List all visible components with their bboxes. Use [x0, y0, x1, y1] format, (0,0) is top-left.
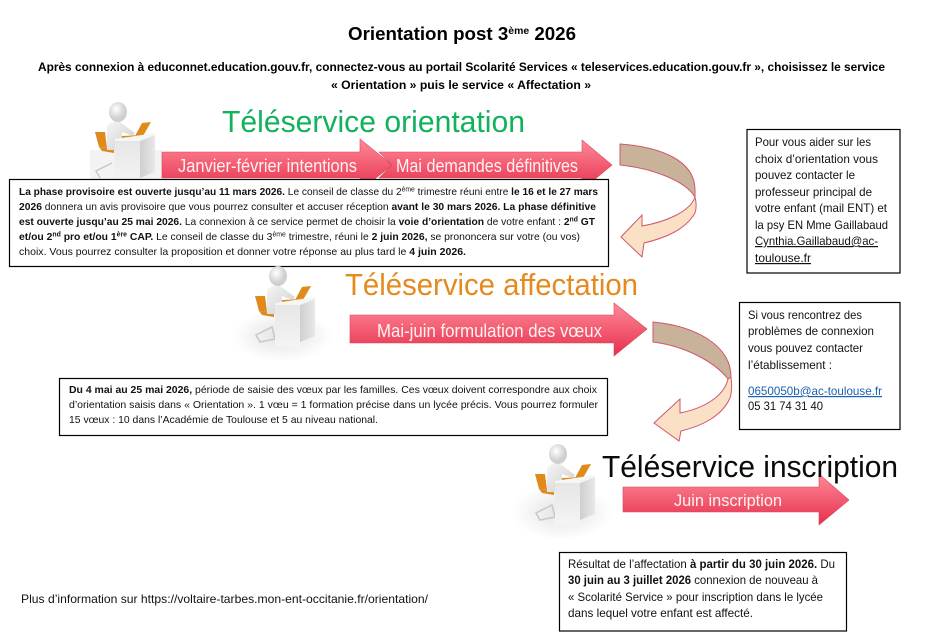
panel: phase provisoire text: 2026 donnera un avis provisoire que vous pourrez consulter et accuser réception avant le 30 mars 2026. La phase définitive: [19, 201, 596, 213]
arrow: Juin inscription: Juin inscription: [674, 491, 782, 510]
title: ème: [508, 26, 530, 37]
panel: phase provisoire text: trimestre, réuni le: [286, 231, 372, 243]
intro text: [38, 60, 885, 92]
curved arrow 1: [620, 144, 696, 257]
panel: phase provisoire text: Le conseil de classe du 3: [156, 231, 274, 243]
panel: résultat affectation: [560, 552, 846, 631]
arrow: Mai demandes définitives: [379, 140, 612, 190]
panel: phase provisoire text: ème: [402, 186, 415, 194]
arrow: Juin inscription: [623, 474, 849, 525]
panel: saisie des vœux: 15 vœux : 10 dans l’Académie de Toulouse et 5 au niveau national.: [69, 414, 378, 426]
intro text: Après connexion à educonnet.education.gouv.fr, connectez-vous au portail Scolarité Services « teleservices.education.gouv.fr », choisissez le service: [38, 60, 885, 74]
icon: person at desk 1: [90, 102, 162, 183]
intro text: « Orientation » puis le service « Affectation »: [331, 78, 591, 92]
panel: aide orientation: professeur principal de: [755, 185, 872, 199]
panel: phase provisoire text: trimestre réuni entre: [415, 186, 511, 198]
title: Orientation post 3: [348, 24, 502, 44]
panel: contact établissement: vous pouvez contacter: [748, 341, 863, 355]
panel: contact établissement: Si vous rencontrez des: [748, 308, 862, 322]
heading: Téléservice orientation: Téléservice orientation: [222, 104, 525, 139]
icon: person at desk 3: [512, 444, 612, 540]
panel: contact établissement: l’établissement :: [748, 358, 832, 372]
arrow: Mai-juin formulation des vœux: [350, 303, 647, 356]
curved arrow 2: [653, 322, 732, 441]
panel: aide orientation: votre enfant (mail ENT) et: [755, 201, 888, 215]
panel: phase provisoire text: ère: [117, 232, 127, 238]
arrow: Janvier-février intentions: Janvier-février intentions: [178, 156, 357, 176]
panel: saisie des vœux: [60, 378, 608, 436]
panel: aide orientation: la psy EN Mme Gaillabaud: [755, 218, 888, 232]
panel: aide orientation: Pour vous aider sur les: [755, 135, 871, 149]
arrow: Mai demandes définitives: Mai demandes définitives: [396, 156, 578, 176]
footer text: Plus d’information sur https://voltaire-tarbes.mon-ent-occitanie.fr/orientation/: [21, 592, 429, 606]
panel: phase provisoire text: ème: [272, 232, 286, 238]
panel: contact établissement: [740, 302, 900, 430]
panel: phase provisoire text: nd: [570, 216, 578, 224]
panel: phase provisoire text: et/ou 2: [19, 231, 53, 243]
panel: phase provisoire text: choix. Vous pourrez consulter la proposition et donner votre réponse au plus tard le 4 juin 2026.: [19, 246, 466, 258]
panel: phase provisoire text: 2 juin 2026, se prononcera sur votre (ou vos): [372, 231, 582, 243]
panel: résultat affectation: Résultat de l’affectation à partir du 30 juin 2026. Du: [568, 557, 835, 571]
panel: résultat affectation: « Scolarité Service » pour inscription dans le lycée: [568, 590, 823, 604]
panel: saisie des vœux: Du 4 mai au 25 mai 2026, période de saisie des vœux par les familles. Ces vœux doivent correspondre aux choix: [69, 384, 598, 396]
panel: aide orientation: Cynthia.Gaillabaud@ac-: [755, 234, 878, 248]
heading: Téléservice affectation: Téléservice affectation: [345, 267, 638, 302]
panel: résultat affectation: dans lequel votre enfant est affecté.: [568, 606, 753, 620]
icon: person at desk 2: [232, 266, 332, 362]
panel: phase provisoire text: le 16 et le 27 mars: [511, 186, 598, 198]
panel: aide orientation: choix d’orientation vous: [755, 152, 878, 166]
panel: aide orientation: toulouse.fr: [755, 251, 811, 265]
panel: phase provisoire text: nd: [52, 232, 61, 238]
panel: phase provisoire text: CAP.: [127, 231, 153, 243]
panel: phase provisoire text: La phase provisoire est ouverte jusqu’au 11 mars 2026. Le conseil de classe du 2: [19, 186, 406, 198]
arrow: Janvier-février intentions: [162, 139, 392, 191]
arrow: Mai-juin formulation des vœux: Mai-juin formulation des vœux: [377, 321, 602, 341]
panel: phase provisoire text: est ouverte jusqu’au 25 mai 2026. La connexion à ce service permet de choisir la voie d’orientation de votre enfant : 2: [19, 216, 570, 228]
panel: phase provisoire text: pro et/ou 1: [61, 231, 117, 243]
title: 2026: [529, 24, 576, 44]
panel: aide orientation: pouvez contacter le: [755, 168, 855, 182]
panel: phase provisoire text: GT: [578, 216, 596, 228]
panel: saisie des vœux: d’orientation saisis dans « Orientation ». 1 vœu = 1 formation précise dans un lycée précis. Vous pourrez formuler: [69, 399, 598, 411]
heading: Téléservice inscription: Téléservice inscription: [602, 449, 898, 484]
panel: phase provisoire text: [10, 180, 608, 266]
panel: aide orientation: [747, 130, 900, 273]
panel: contact établissement: problèmes de connexion: [748, 324, 874, 338]
panel: contact établissement: 0650050b@ac-toulouse.fr: [748, 384, 882, 398]
panel: résultat affectation: 30 juin au 3 juillet 2026 connexion de nouveau à: [568, 573, 818, 587]
panel: contact établissement: 05 31 74 31 40: [748, 399, 823, 413]
